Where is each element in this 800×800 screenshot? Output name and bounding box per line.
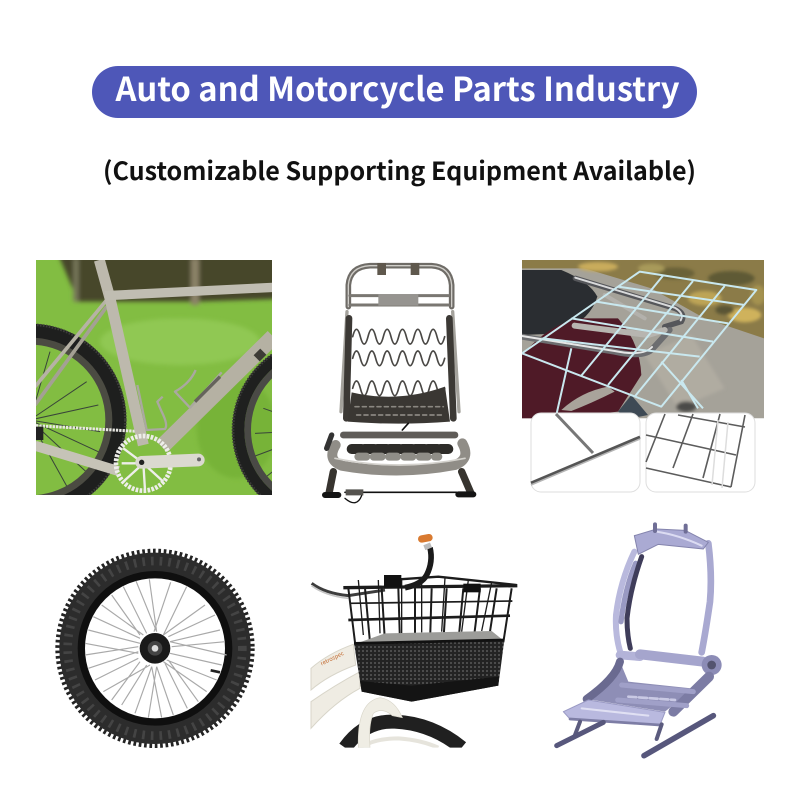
photo: bicycle frame	[36, 260, 272, 495]
product: seat frame with springs	[325, 263, 473, 503]
title pill: Auto and Motorcycle Parts Industry	[115, 63, 680, 111]
tyre	[58, 552, 252, 745]
photo: motorcycle rack	[522, 260, 765, 418]
hub	[140, 633, 170, 664]
subtitle: (Customizable Supporting Equipment Available)	[103, 152, 696, 188]
inset: rack tube detail	[531, 413, 640, 492]
basket wires	[343, 577, 517, 642]
photo: bicycle basket: retrospec	[319, 648, 345, 667]
backrest hoop	[348, 266, 452, 307]
spokes	[85, 579, 227, 718]
photo: bicycle basket	[311, 538, 517, 748]
rim	[81, 575, 229, 722]
product: spoked tyre wheel	[58, 552, 252, 745]
inset: rack grid detail	[646, 413, 755, 492]
product: seat frame in metallic purple	[557, 524, 722, 756]
springs	[353, 329, 445, 344]
